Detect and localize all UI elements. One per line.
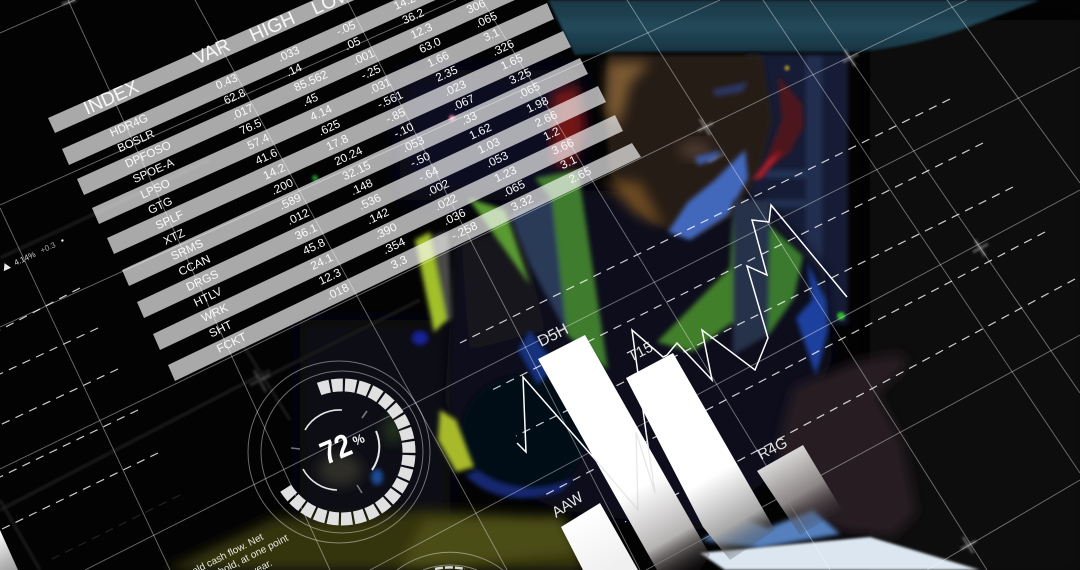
row: SPOE-A: 63.0 <box>418 36 443 56</box>
row: SHT: .354 <box>381 235 408 257</box>
row: HTLV <box>192 125 562 309</box>
row: DRGS: 2.66 <box>533 108 559 130</box>
row: HTLV: 45.8 <box>301 236 328 258</box>
photo: olive glow along lower edge <box>165 416 585 570</box>
row: SRMS: .589 <box>277 191 303 213</box>
row: HDR4G <box>108 0 418 140</box>
row: BOSLR <box>116 7 426 155</box>
row: XTZ: 20.24 <box>332 144 365 168</box>
row: HTLV: .002 <box>425 177 451 199</box>
row: CCAN: .148 <box>349 177 375 198</box>
row: DPFOSO: 85.562 <box>292 69 330 94</box>
table header: INDEX <box>80 77 142 120</box>
row: SPLF: .023 <box>442 78 468 99</box>
row: SPLF: -.85 <box>384 106 407 126</box>
row: DRGS: 36.1 <box>293 221 319 243</box>
row: FCKT: -.258 <box>449 219 480 243</box>
photo: torso <box>445 190 832 530</box>
row: BOSLR: .14 <box>284 62 305 79</box>
row: SPLF: 1.65 <box>499 52 525 73</box>
row: DPFOSO <box>124 0 488 171</box>
gauge segmented progress arc <box>285 385 409 519</box>
gauge outer rings <box>248 361 430 543</box>
bar: T15 <box>625 339 775 560</box>
row: HTLV: HTLV <box>192 285 224 309</box>
bar: T15: T15 <box>625 339 656 366</box>
row: BOSLR: BOSLR <box>116 128 157 155</box>
corner white bar fragment <box>0 530 18 570</box>
row: HDR4G: .033 <box>276 45 302 65</box>
radial gauge 72% <box>248 361 430 543</box>
row: HDR4G: 0.43 <box>214 72 240 92</box>
bar chart <box>535 321 842 570</box>
row: BOSLR: 36.2 <box>401 7 426 27</box>
bar: D5H: D5H <box>535 321 571 351</box>
row: SPOE-A: 76.5 <box>238 117 264 138</box>
photo: teal ceiling <box>548 0 1040 55</box>
row: FCKT: .018 <box>325 281 352 303</box>
row: CCAN <box>177 94 551 279</box>
row: HTLV: 1.2 <box>541 125 562 143</box>
bar: AAW <box>549 488 638 570</box>
row: SPOE-A: .45 <box>301 92 320 109</box>
row: GTG: -.561 <box>375 89 405 111</box>
row: CCAN: -.50 <box>408 150 433 170</box>
row: LPSO: 1.66 <box>426 50 451 70</box>
row: WRK: 1.23 <box>492 163 519 185</box>
photo: lit panel behind head <box>746 54 848 324</box>
row: SPOE-A: -.25 <box>360 63 383 82</box>
row: XTZ: 3.25 <box>507 66 533 87</box>
row: XTZ: .067 <box>450 92 477 113</box>
gauge percent sign: % <box>350 430 367 449</box>
photo: blue sleeve highlights <box>371 262 828 498</box>
row: SHT: .065 <box>501 178 528 200</box>
row: DPFOSO: DPFOSO <box>124 140 173 171</box>
row: SPOE-A: SPOE-A <box>131 157 176 186</box>
row: WRK: 24.1 <box>309 251 335 273</box>
row: SPOE-A: .065 <box>474 10 499 31</box>
row: WRK <box>199 136 577 325</box>
faint crosshair near gauge <box>250 154 724 392</box>
row: SHT: SHT <box>207 318 234 340</box>
row: FCKT: 2.65 <box>567 164 594 186</box>
chart line ghost over bars <box>593 432 655 510</box>
ticker readout <box>1 236 66 273</box>
row: GTG <box>146 37 516 217</box>
row: CCAN: 1.62 <box>467 121 494 142</box>
bar: AAW: AAW <box>549 488 587 521</box>
row: FCKT <box>215 164 594 356</box>
row: SRMS: SRMS <box>169 237 206 263</box>
table header <box>80 0 357 120</box>
row: BOSLR: 62.8 <box>222 87 248 107</box>
row: LPSO: LPSO <box>139 178 172 201</box>
row: XTZ: .200 <box>269 176 296 198</box>
row: DPFOSO: .001 <box>351 48 377 68</box>
photo: dark forearm <box>461 375 585 495</box>
row: HDR4G: -.05 <box>335 19 358 38</box>
row: GTG: 41.6 <box>253 146 279 168</box>
bar: R4G <box>755 434 842 535</box>
row: SHT: .036 <box>441 206 468 228</box>
gauge inner arcs and ticks <box>291 410 379 493</box>
row: CCAN: 1.98 <box>524 94 551 116</box>
row: XTZ <box>161 66 533 248</box>
faint background grid <box>0 160 420 570</box>
photo: hand <box>777 353 917 537</box>
photo: status LEDs <box>312 66 845 320</box>
row: SRMS <box>169 80 542 263</box>
row: SHT <box>207 153 579 340</box>
row: SPLF: 17.8 <box>324 132 350 153</box>
row: DRGS: 1.03 <box>476 135 502 157</box>
photo: left ear muff <box>552 85 586 168</box>
row: GTG: GTG <box>146 195 174 217</box>
row: GTG: .326 <box>490 37 516 59</box>
gauge value: 72 <box>315 427 357 472</box>
row: WRK: .390 <box>373 221 400 242</box>
row: DRGS: .536 <box>357 191 383 213</box>
row: WRK: .022 <box>433 192 459 213</box>
row: LPSO: 4.14 <box>309 103 335 124</box>
row: CCAN: .012 <box>285 206 311 228</box>
photo: high-visibility vest <box>415 170 803 472</box>
line chart <box>517 205 847 510</box>
row: WRK: WRK <box>199 301 230 325</box>
bar: D5H <box>535 321 710 570</box>
row: CCAN: CCAN <box>177 253 212 279</box>
row: WRK: 3.66 <box>550 136 577 158</box>
row: SHT: 12.3 <box>317 266 344 288</box>
row: SPLF: 14.2 <box>261 161 287 183</box>
row: SPLF: SPLF <box>154 208 186 232</box>
row: HTLV: .053 <box>484 149 510 171</box>
row: XTZ: -.10 <box>392 120 416 141</box>
photo: dark server racks <box>300 20 1080 570</box>
row: GTG: 2.35 <box>434 63 460 85</box>
row: LPSO: .031 <box>368 76 393 97</box>
row: SPOE-A <box>131 10 499 186</box>
photo: blue glow above tablet <box>702 510 840 548</box>
row: DPFOSO: .017 <box>230 102 256 123</box>
ticker readout: +0.3 <box>39 240 58 255</box>
row: SRMS: .065 <box>516 80 542 101</box>
row: FCKT: 3.32 <box>509 192 536 214</box>
row: SHT: 3.1 <box>558 153 579 172</box>
photo: blue light on chin <box>668 82 748 240</box>
row: LPSO <box>139 27 502 201</box>
photo: red ear muffs <box>752 76 804 180</box>
row: FCKT: FCKT <box>215 331 249 356</box>
data table <box>48 0 641 381</box>
dashed guide lines <box>0 99 1075 530</box>
row: DPFOSO: 12.3 <box>409 22 434 42</box>
row: SRMS: 32.15 <box>341 159 373 183</box>
photo: head and face <box>604 55 772 238</box>
row: LPSO: 57.4 <box>246 132 272 152</box>
table header: VAR <box>190 35 233 70</box>
icon: up triangle <box>1 261 11 271</box>
ticker readout: 4.14% <box>13 250 37 267</box>
table header: HIGH <box>246 8 298 47</box>
photo: tablet <box>700 537 980 570</box>
faint dashed guide line <box>50 495 180 560</box>
row: FCKT: 3.3 <box>389 253 410 272</box>
row: SRMS: .053 <box>400 134 426 155</box>
row: BOSLR: .05 <box>343 36 363 53</box>
row: SPLF <box>154 52 525 232</box>
row: XTZ: XTZ <box>161 227 187 248</box>
row: HDR4G: HDR4G <box>108 112 150 140</box>
bar: R4G: R4G <box>755 434 790 464</box>
row: DRGS: -.64 <box>417 164 441 185</box>
row: GTG: .625 <box>316 117 342 139</box>
row: HTLV: .142 <box>365 206 391 227</box>
row: DRGS: DRGS <box>184 268 221 294</box>
table striped bands <box>48 0 641 381</box>
row: DRGS <box>184 108 559 294</box>
row: SRMS: .33 <box>459 109 479 128</box>
row: LPSO: 3.1 <box>482 27 502 44</box>
second radial gauge, cropped by edge <box>397 552 503 570</box>
